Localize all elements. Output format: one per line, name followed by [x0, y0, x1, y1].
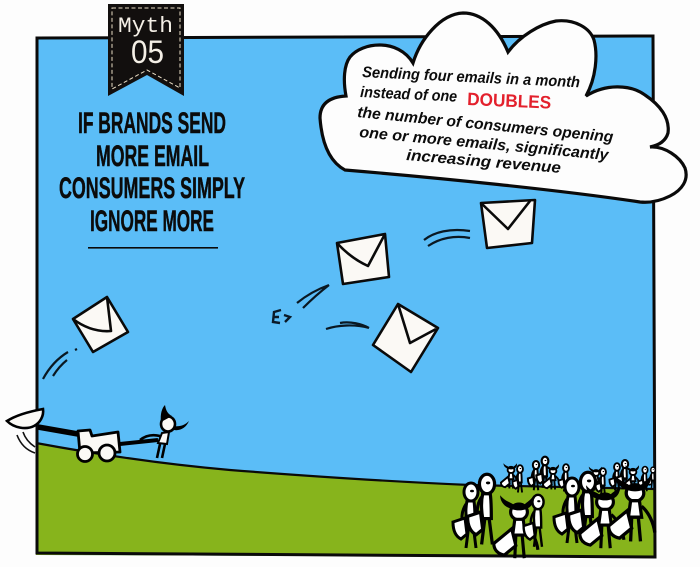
callout cloud [320, 13, 686, 202]
catapult body [78, 430, 120, 453]
banner: Myth 05 [108, 4, 184, 96]
catapult and operator [7, 405, 189, 462]
envelope: lower [373, 304, 438, 372]
small puff mark [273, 310, 290, 323]
catapult wheels [78, 445, 115, 462]
envelope: top right [481, 200, 535, 248]
heading: CONSUMERS SIMPLY [59, 172, 245, 205]
panel: green hill [36, 443, 654, 557]
heading: IGNORE MORE [90, 205, 214, 238]
banner label: Myth [118, 14, 173, 39]
cloud shape [320, 13, 686, 202]
envelope: middle [337, 234, 389, 284]
callout cloud: the number of consumers opening [357, 104, 615, 146]
callout cloud: one or more emails, significantly [359, 124, 611, 164]
crowd: back row [501, 457, 655, 496]
heading rule [88, 247, 218, 249]
heading: MORE EMAIL [96, 140, 209, 173]
cloud text: Sending four emails in a month [362, 64, 580, 91]
envelope: left [73, 297, 128, 352]
motion lines: middle envelope [297, 285, 329, 308]
catapult handle [120, 440, 158, 444]
motion lines: top right envelope [424, 230, 470, 246]
catapult arm [38, 427, 78, 434]
catapult bowl [7, 409, 43, 428]
callout cloud: instead of one [360, 84, 458, 106]
banner ribbon [108, 4, 184, 96]
banner number: 05 [131, 34, 164, 70]
heading [59, 107, 245, 238]
operator [140, 405, 189, 458]
hill outline [36, 443, 654, 489]
recoil lines [17, 432, 35, 453]
highlighted word: DOUBLES [467, 89, 552, 113]
motion lines: left envelope [43, 349, 77, 379]
motion lines: lower envelope [326, 322, 369, 329]
callout cloud: increasing revenue [406, 147, 562, 177]
banner stitching [112, 8, 180, 89]
crowd: front row [453, 472, 655, 558]
heading: IF BRANDS SEND [78, 107, 226, 140]
